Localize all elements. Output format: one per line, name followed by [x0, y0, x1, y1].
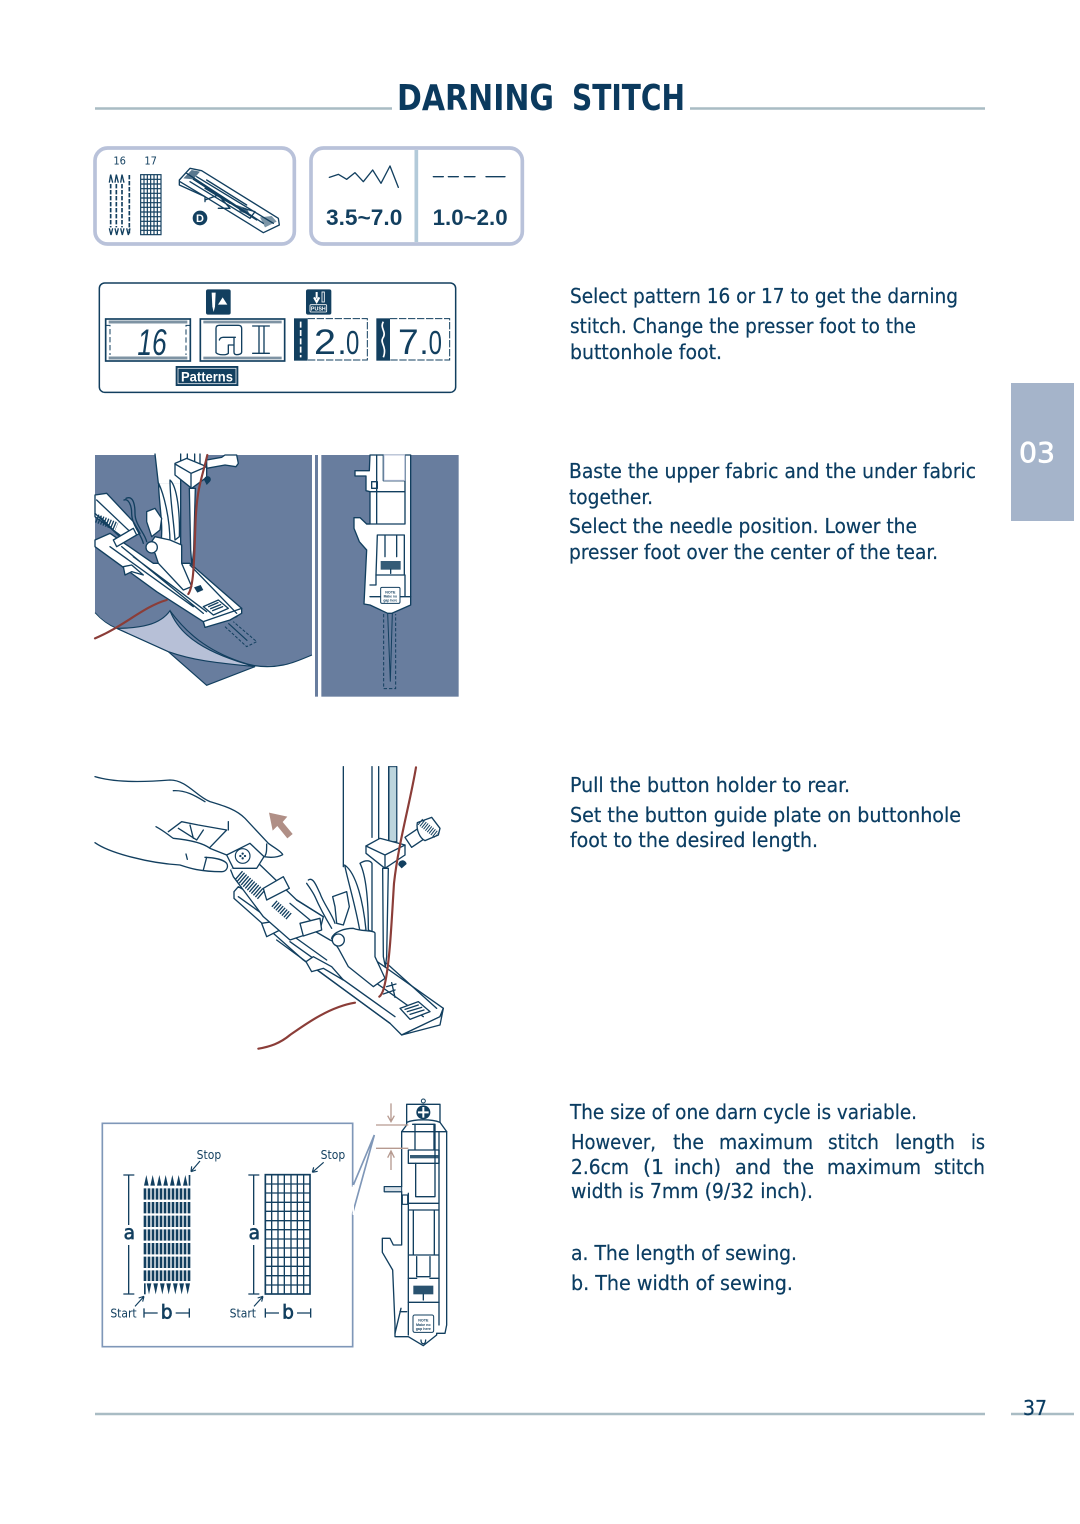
icon: push: [306, 289, 331, 315]
LCD: stitch width 7.0: 7: [398, 323, 419, 362]
illustration: foot top view with guide plate: [376, 1099, 447, 1346]
dimension a, right: a: [249, 1223, 260, 1244]
panel: stitch width and length: 1.0~2.0: [433, 205, 508, 230]
illustration: hand pulling button holder: [95, 767, 443, 1049]
fabric: [95, 455, 312, 685]
panel: pattern and foot selection: 17: [144, 155, 157, 168]
LCD: stitch length 2.0: 0: [346, 325, 359, 362]
page number: 37: [1023, 1396, 1047, 1420]
buttonhole foot: [95, 493, 242, 627]
chapter tab: 03: [1019, 436, 1055, 469]
text block: step 3: foot to the desired length.: [570, 828, 818, 852]
dimension b, right: [265, 1302, 311, 1323]
text block: legend a and b: [571, 1241, 797, 1295]
illustration: foot top view with guide plate: Make no: [416, 1323, 431, 1327]
labels: Stop and Start: Stop: [197, 1148, 221, 1162]
dimension b, right: b: [282, 1302, 294, 1323]
dimension b, left: b: [161, 1302, 173, 1323]
text block: step 4: [569, 1100, 985, 1203]
panel: pattern and foot selection: 16: [113, 155, 126, 168]
text block: step 1: [570, 284, 958, 364]
label: Patterns: [176, 366, 238, 386]
text block: step 4: (1: [643, 1155, 664, 1179]
LCD: stitch length 2.0: .: [337, 325, 347, 362]
icon: buttonhole presser foot: D: [196, 213, 204, 225]
text block: step 4: stitch: [934, 1155, 985, 1179]
text block: step 2: Baste the upper fabric and the under fabric: [569, 459, 976, 483]
text block: step 4: inch): [674, 1155, 721, 1179]
title: STITCH: [572, 78, 685, 119]
text block: step 4: the: [673, 1130, 704, 1154]
hand: [95, 777, 283, 873]
labels: Stop and Start: Stop: [321, 1148, 345, 1162]
label: Patterns: Patterns: [181, 369, 233, 384]
text block: step 4: is: [971, 1130, 985, 1154]
chapter tab: [1011, 383, 1074, 521]
illustration: presser foot, front view over tear: NOTE: [385, 591, 396, 595]
illustration: presser foot, front view over tear: Make no: [384, 595, 397, 599]
text block: step 4: and: [735, 1155, 771, 1179]
LCD: stitch width 7.0: .: [419, 325, 429, 362]
LCD: pattern number: 16: [137, 321, 167, 363]
dimension a, left: a: [124, 1223, 135, 1244]
text block: step 4: The size of one darn cycle is variable.: [569, 1100, 917, 1124]
text block: step 4: the: [783, 1155, 814, 1179]
panel: LCD display: [99, 283, 456, 392]
text block: step 4: length: [895, 1130, 955, 1154]
LCD: stitch width 7.0: [376, 318, 450, 362]
thread: [188, 455, 207, 594]
text block: step 3: Set the button guide plate on buttonhole: [570, 803, 961, 827]
panel: stitch width and length: [311, 148, 522, 244]
tear outline: [225, 622, 257, 647]
dimension b, left: [144, 1302, 189, 1323]
text block: step 2: together.: [569, 485, 653, 509]
title: DARNING: [397, 78, 554, 119]
illustration: presser foot, front view over tear: [315, 455, 459, 697]
panel: stitch width and length: 3.5~7.0: [326, 205, 402, 230]
LCD: pattern number: [106, 319, 190, 363]
icon: stitch pattern 16: [109, 175, 130, 235]
diagram: stitch size box: [102, 1123, 374, 1347]
LCD: stitch length 2.0: [294, 318, 367, 362]
title: [392, 78, 690, 119]
illustration: foot top view with guide plate: gap here: [416, 1327, 431, 1331]
icon: zigzag width: [329, 166, 398, 187]
measure arrows: [376, 1103, 408, 1170]
darning pattern 16: [144, 1175, 190, 1294]
text block: step 4: However,: [571, 1130, 656, 1154]
dimension a, left: [123, 1175, 135, 1294]
panel: pattern and foot selection: [95, 148, 294, 244]
needle bar: [343, 767, 440, 967]
text block: step 1: Select pattern 16 or 17 to get the darning: [570, 284, 958, 308]
text block: step 4: 2.6cm: [571, 1155, 629, 1179]
darning pattern 17: [265, 1175, 310, 1294]
text block: step 2: presser foot over the center of the tear.: [569, 540, 938, 564]
text block: step 3: [570, 773, 961, 852]
text block: legend a and b: a. The length of sewing.: [571, 1241, 797, 1265]
icon: buttonhole presser foot: [179, 168, 279, 233]
icon: push: PUSH: [311, 307, 326, 313]
labels: Stop and Start: Start: [110, 1306, 137, 1320]
needle bar and clamp: [155, 454, 238, 590]
text block: legend a and b: b. The width of sewing.: [571, 1271, 793, 1295]
text block: step 4: maximum: [719, 1130, 813, 1154]
illustration: presser foot, front view over tear: gap here: [383, 599, 397, 603]
LCD: presser foot: [200, 319, 285, 361]
labels: Stop and Start: Start: [230, 1306, 256, 1320]
icon: dashed length: [433, 175, 505, 179]
text block: step 4: width is 7mm (9/32 inch).: [571, 1179, 813, 1203]
text block: step 1: buttonhole foot.: [570, 340, 722, 364]
icon: stitch pattern 17: [141, 175, 161, 235]
fabric flap: [117, 611, 255, 667]
icon: needle position: [206, 289, 231, 315]
text block: step 4: stitch: [828, 1130, 879, 1154]
text block: step 2: Select the needle position. Lower the: [569, 514, 917, 538]
text block: step 1: stitch. Change the presser foot to the: [570, 314, 916, 338]
text block: step 3: Pull the button holder to rear.: [570, 773, 850, 797]
button holder slider: [230, 862, 385, 987]
foot outline: [354, 455, 411, 613]
text block: step 2: [569, 459, 976, 564]
text block: step 4: maximum: [827, 1155, 921, 1179]
LCD: stitch length 2.0: 2: [314, 323, 336, 362]
illustration: foot top view with guide plate: NOTE: [418, 1319, 429, 1323]
labels: Stop and Start: [110, 1148, 345, 1320]
buttonhole foot body: [234, 887, 443, 1035]
arrow: pull direction: [269, 813, 293, 838]
LCD: stitch width 7.0: 0: [429, 325, 442, 362]
thread: [379, 767, 416, 997]
illustration: fabric and presser foot, angled view: [95, 454, 312, 685]
dimension a, right: [248, 1175, 260, 1294]
